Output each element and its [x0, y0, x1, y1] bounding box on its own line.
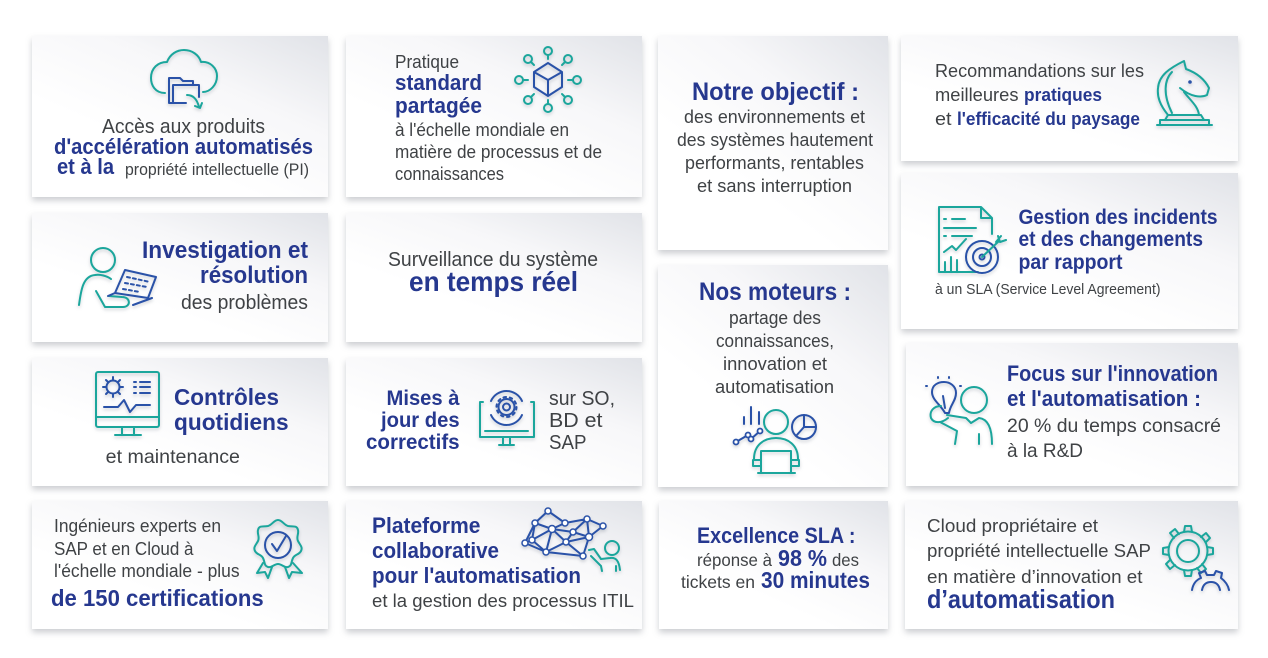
- text: nos moteurs: [699, 278, 851, 397]
- panel: notre objectif: [658, 36, 888, 250]
- text: nos moteurs: automatisation: [715, 376, 834, 397]
- text: ingénieurs experts: l'échelle mondiale - plus: [54, 560, 240, 581]
- text: nos moteurs: connaissances,: [716, 330, 834, 351]
- text: contrôles quotidiens et maintenance: et maintenance: [106, 446, 240, 468]
- text: focus innovation: et l'automatisation :: [1007, 386, 1201, 411]
- panel: surveillance: [346, 213, 642, 342]
- text: sur SO, BD et SAP: SAP: [549, 431, 586, 454]
- text: mises à jour des correctifs: [366, 387, 460, 454]
- text: plateforme collaborative: [372, 513, 634, 611]
- panel: excellence SLA: [659, 501, 888, 629]
- text: pratique standard partagée: Pratique: [395, 51, 459, 72]
- text: recommandations: Recommandations sur les: [935, 60, 1144, 81]
- icon: certification badge: [254, 520, 302, 578]
- text: accès aux produits: et à la: [57, 154, 115, 179]
- text: notre objectif: performants, rentables: [685, 152, 864, 173]
- icon: document with target: [939, 207, 1006, 273]
- text: sur SO, BD et SAP: sur SO,: [549, 387, 615, 410]
- icon: person at laptop: [79, 248, 156, 307]
- text: recommandations: et: [935, 108, 952, 129]
- text: cloud propriétaire: [927, 515, 1151, 614]
- text: contrôles quotidiens et maintenance: quotidiens: [174, 409, 289, 435]
- text: gestion des incidents: Gestion des incidents: [1018, 206, 1218, 229]
- panel: recommandations: [901, 36, 1238, 161]
- text: plateforme collaborative: Plateforme: [372, 513, 480, 538]
- text: investigation et résolution: des problèmes: [181, 291, 308, 314]
- text: focus innovation: [1007, 361, 1221, 462]
- panel: nos moteurs: [658, 265, 888, 487]
- text: recommandations: meilleures: [935, 84, 1018, 105]
- text: ingénieurs experts: de 150 certifications: [51, 585, 264, 611]
- text: pratique standard partagée: à l'échelle mondiale en: [395, 119, 569, 140]
- text: plateforme collaborative: collaborative: [372, 538, 499, 563]
- text: contrôles quotidiens et maintenance: [106, 384, 289, 468]
- text: surveillance en temps réel: Surveillance du système: [388, 248, 598, 271]
- text: notre objectif: Notre objectif :: [692, 78, 859, 106]
- text: cloud propriétaire: propriété intellectuelle SAP: [927, 540, 1151, 561]
- text: ingénieurs experts: Ingénieurs experts en: [54, 515, 221, 536]
- text: plateforme collaborative: et la gestion des processus ITIL: [372, 590, 634, 611]
- icon: monitor with gear and pulse: [96, 372, 159, 435]
- text: accès aux produits: d'accélération automatisés: [54, 134, 313, 159]
- text: investigation et résolution: résolution: [200, 262, 308, 289]
- text: accès aux produits: Accès aux produits: [102, 115, 265, 138]
- text: contrôles quotidiens et maintenance: Contrôles: [174, 384, 279, 410]
- text: recommandations: l'efficacité du paysage: [957, 108, 1140, 129]
- panel: accélération: [32, 36, 328, 197]
- text: pratique standard partagée: matière de processus et de: [395, 141, 602, 162]
- text: sur SO, BD et SAP: BD et: [549, 409, 603, 432]
- text: pratique standard partagée: connaissances: [395, 163, 504, 184]
- text: gestion des incidents: à un SLA (Service Level Agreement): [935, 281, 1160, 298]
- text: excellence SLA: 30 minutes: [761, 567, 870, 593]
- text: plateforme collaborative: pour l'automatisation: [372, 563, 581, 588]
- text: gestion des incidents: et des changements: [1018, 228, 1203, 251]
- icon: gears: [1163, 526, 1229, 590]
- panel: investigation: [32, 213, 328, 342]
- text: nos moteurs: partage des: [729, 307, 821, 328]
- text: nos moteurs: innovation et: [723, 353, 827, 374]
- text: pratique standard partagée: standard: [395, 70, 482, 95]
- text: notre objectif: des systèmes hautement: [677, 129, 873, 150]
- text: excellence SLA: des: [832, 550, 859, 570]
- text: cloud propriétaire: d’automatisation: [927, 584, 1115, 614]
- text: surveillance en temps réel: en temps réel: [409, 266, 578, 297]
- text: pratique standard partagée: [395, 51, 602, 184]
- text: excellence SLA: 98 %: [778, 545, 827, 571]
- text: mises à jour des correctifs: Mises à: [386, 387, 460, 410]
- text: excellence SLA: Excellence SLA :: [697, 523, 856, 548]
- text: focus innovation: Focus sur l'innovation: [1007, 361, 1218, 386]
- text: notre objectif: et sans interruption: [697, 175, 852, 196]
- panel: plateforme collaborative: [346, 501, 642, 629]
- panel: cloud propriétaire: [905, 501, 1238, 629]
- text: accès aux produits: [54, 115, 313, 179]
- text: cloud propriétaire: Cloud propriétaire et: [927, 515, 1098, 536]
- text: cloud propriétaire: en matière d’innovation et: [927, 566, 1142, 587]
- text: focus innovation: à la R&D: [1007, 440, 1083, 462]
- text: ingénieurs experts: SAP et en Cloud à: [54, 538, 194, 559]
- text: notre objectif: des environnements et: [684, 106, 865, 127]
- text: mises à jour des correctifs: correctifs: [366, 431, 460, 454]
- icon: network and person: [522, 508, 620, 571]
- icon: chess knight: [1157, 61, 1212, 125]
- text: focus innovation: 20 % du temps consacré: [1007, 415, 1221, 437]
- text: pratique standard partagée: partagée: [395, 93, 482, 118]
- text: excellence SLA: tickets en: [681, 572, 755, 592]
- panel: pratique standard: [346, 36, 642, 197]
- panel: mises à jour: [346, 358, 642, 486]
- text: gestion des incidents: par rapport: [1018, 251, 1123, 274]
- text: mises à jour des correctifs: jour des: [380, 409, 460, 432]
- text: notre objectif: [677, 78, 873, 196]
- text: recommandations: pratiques: [1024, 84, 1102, 105]
- text: excellence SLA: [681, 523, 870, 593]
- icon: cloud and folder: [151, 50, 217, 108]
- text: gestion des incidents: [935, 206, 1218, 298]
- panel: ingénieurs experts: [32, 501, 328, 629]
- text: nos moteurs: Nos moteurs :: [699, 278, 851, 306]
- text: surveillance en temps réel: [388, 248, 598, 297]
- panel: focus innovation: [906, 343, 1238, 486]
- text: investigation et résolution: [142, 237, 308, 314]
- icon: monitor with rotating gear: [480, 391, 534, 445]
- text: investigation et résolution: Investigation et: [142, 237, 308, 264]
- text: accès aux produits: propriété intellectuelle (PI): [125, 161, 309, 179]
- text: sur SO, BD et SAP: [549, 387, 615, 454]
- text: excellence SLA: réponse à: [697, 550, 772, 570]
- icon: cube network: [515, 47, 581, 112]
- panel: contrôles quotidiens: [32, 358, 328, 486]
- icon: person with light bulb: [926, 377, 992, 444]
- icon: person with charts and laptop: [734, 407, 816, 473]
- text: recommandations: [935, 60, 1144, 129]
- panel: gestion des incidents: [901, 173, 1238, 329]
- text: ingénieurs experts: [51, 515, 264, 611]
